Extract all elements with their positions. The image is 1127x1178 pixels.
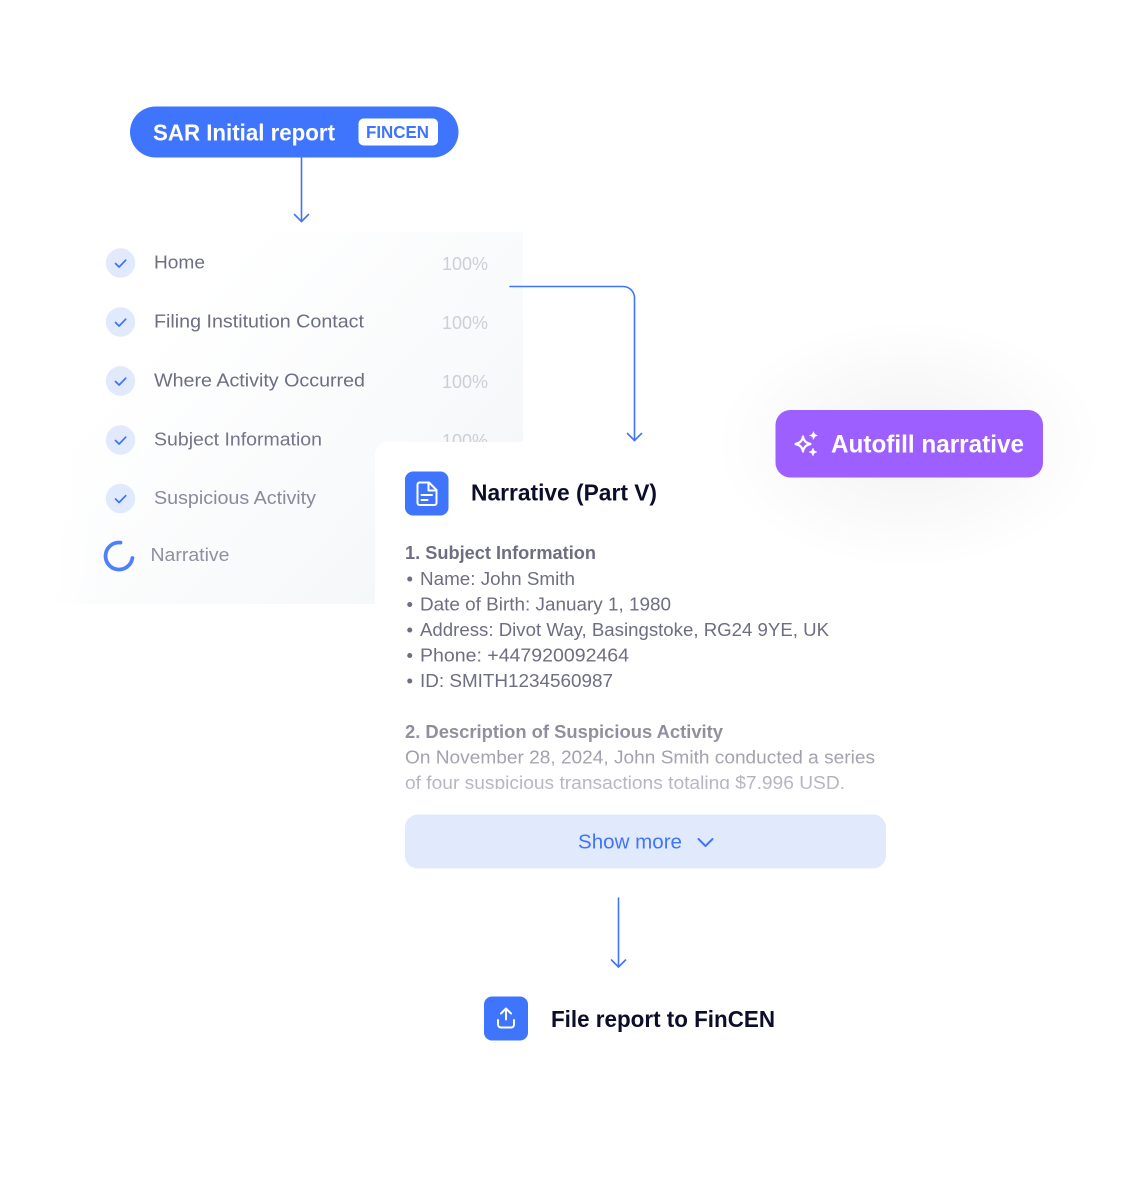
section 1: subject information	[405, 542, 830, 691]
section 1: subject information: Address: Divot Way, Basingstoke, RG24 9YE, UK	[420, 619, 830, 640]
step: Subject Information: 100%	[442, 430, 488, 451]
step: File report to FinCEN	[484, 996, 775, 1040]
step: Suspicious Activity	[106, 484, 317, 513]
step: Where Activity Occurred	[106, 366, 488, 396]
section 2: description of suspicious activity	[406, 724, 874, 789]
header pill: SAR Initial report: SAR Initial report	[153, 120, 335, 146]
section 1: subject information: •	[406, 568, 413, 589]
header pill: SAR Initial report	[130, 106, 458, 158]
step: Where Activity Occurred: 100%	[442, 371, 488, 392]
icon: upload	[484, 996, 528, 1040]
button: Autofill narrative: Autofill narrative	[831, 430, 1024, 458]
step: Home: 100%	[442, 253, 488, 274]
section 1: subject information: Date of Birth: January 1, 1980	[420, 594, 671, 614]
section 2: description of suspicious activity: On November 28, 2024, John Smith conducted a series	[405, 746, 875, 768]
heading: Narrative (Part V): Narrative (Part V)	[471, 480, 657, 506]
arrow: checklist to narrative	[510, 286, 642, 440]
step: Filing Institution Contact: 100%	[442, 312, 488, 333]
button: Show more	[405, 814, 886, 868]
badge: FINCEN: FINCEN	[366, 122, 429, 142]
section 1: subject information: 1. Subject Information	[405, 542, 596, 563]
section 1: subject information: Name: John Smith	[420, 568, 575, 589]
button: Autofill narrative	[776, 410, 1043, 478]
step: Suspicious Activity: Suspicious Activity	[154, 487, 317, 508]
badge: FINCEN	[358, 118, 438, 146]
icon: document	[405, 472, 448, 516]
step: File report to FinCEN: File report to FinCEN	[551, 1006, 775, 1032]
step: Home	[106, 248, 488, 278]
panel: narrative card	[375, 442, 900, 868]
step: Where Activity Occurred: Where Activity Occurred	[154, 370, 365, 390]
step: Subject Information	[106, 425, 488, 455]
panel: progress checklist	[50, 232, 523, 604]
section 1: subject information: •	[406, 644, 413, 666]
icon: sparkles	[796, 432, 817, 456]
section 2: description of suspicious activity: 2. Description of Suspicious Activity	[405, 721, 724, 742]
step: Filing Institution Contact	[106, 307, 488, 337]
step: Subject Information: Subject Information	[154, 428, 322, 450]
step: Home: Home	[154, 252, 205, 272]
step: Narrative (in progress): Narrative	[150, 544, 230, 565]
arrow: narrative to file report	[612, 898, 626, 967]
text block: narrative body	[405, 542, 875, 793]
section 1: subject information: •	[406, 670, 413, 691]
section 1: subject information: •	[406, 619, 413, 640]
section 1: subject information: Phone: +447920092464	[420, 644, 629, 666]
section 1: subject information: ID: SMITH1234560987	[420, 670, 613, 691]
step: Filing Institution Contact: Filing Institution Contact	[154, 310, 364, 332]
section 1: subject information: •	[406, 594, 413, 614]
section 2: description of suspicious activity: of four suspicious transactions totaling $7,996 USD.	[405, 772, 845, 793]
glow behind autofill button	[714, 319, 1104, 569]
step: Narrative (in progress)	[106, 543, 230, 570]
button: Show more: Show more	[578, 832, 682, 854]
arrow: header to checklist	[294, 158, 308, 222]
